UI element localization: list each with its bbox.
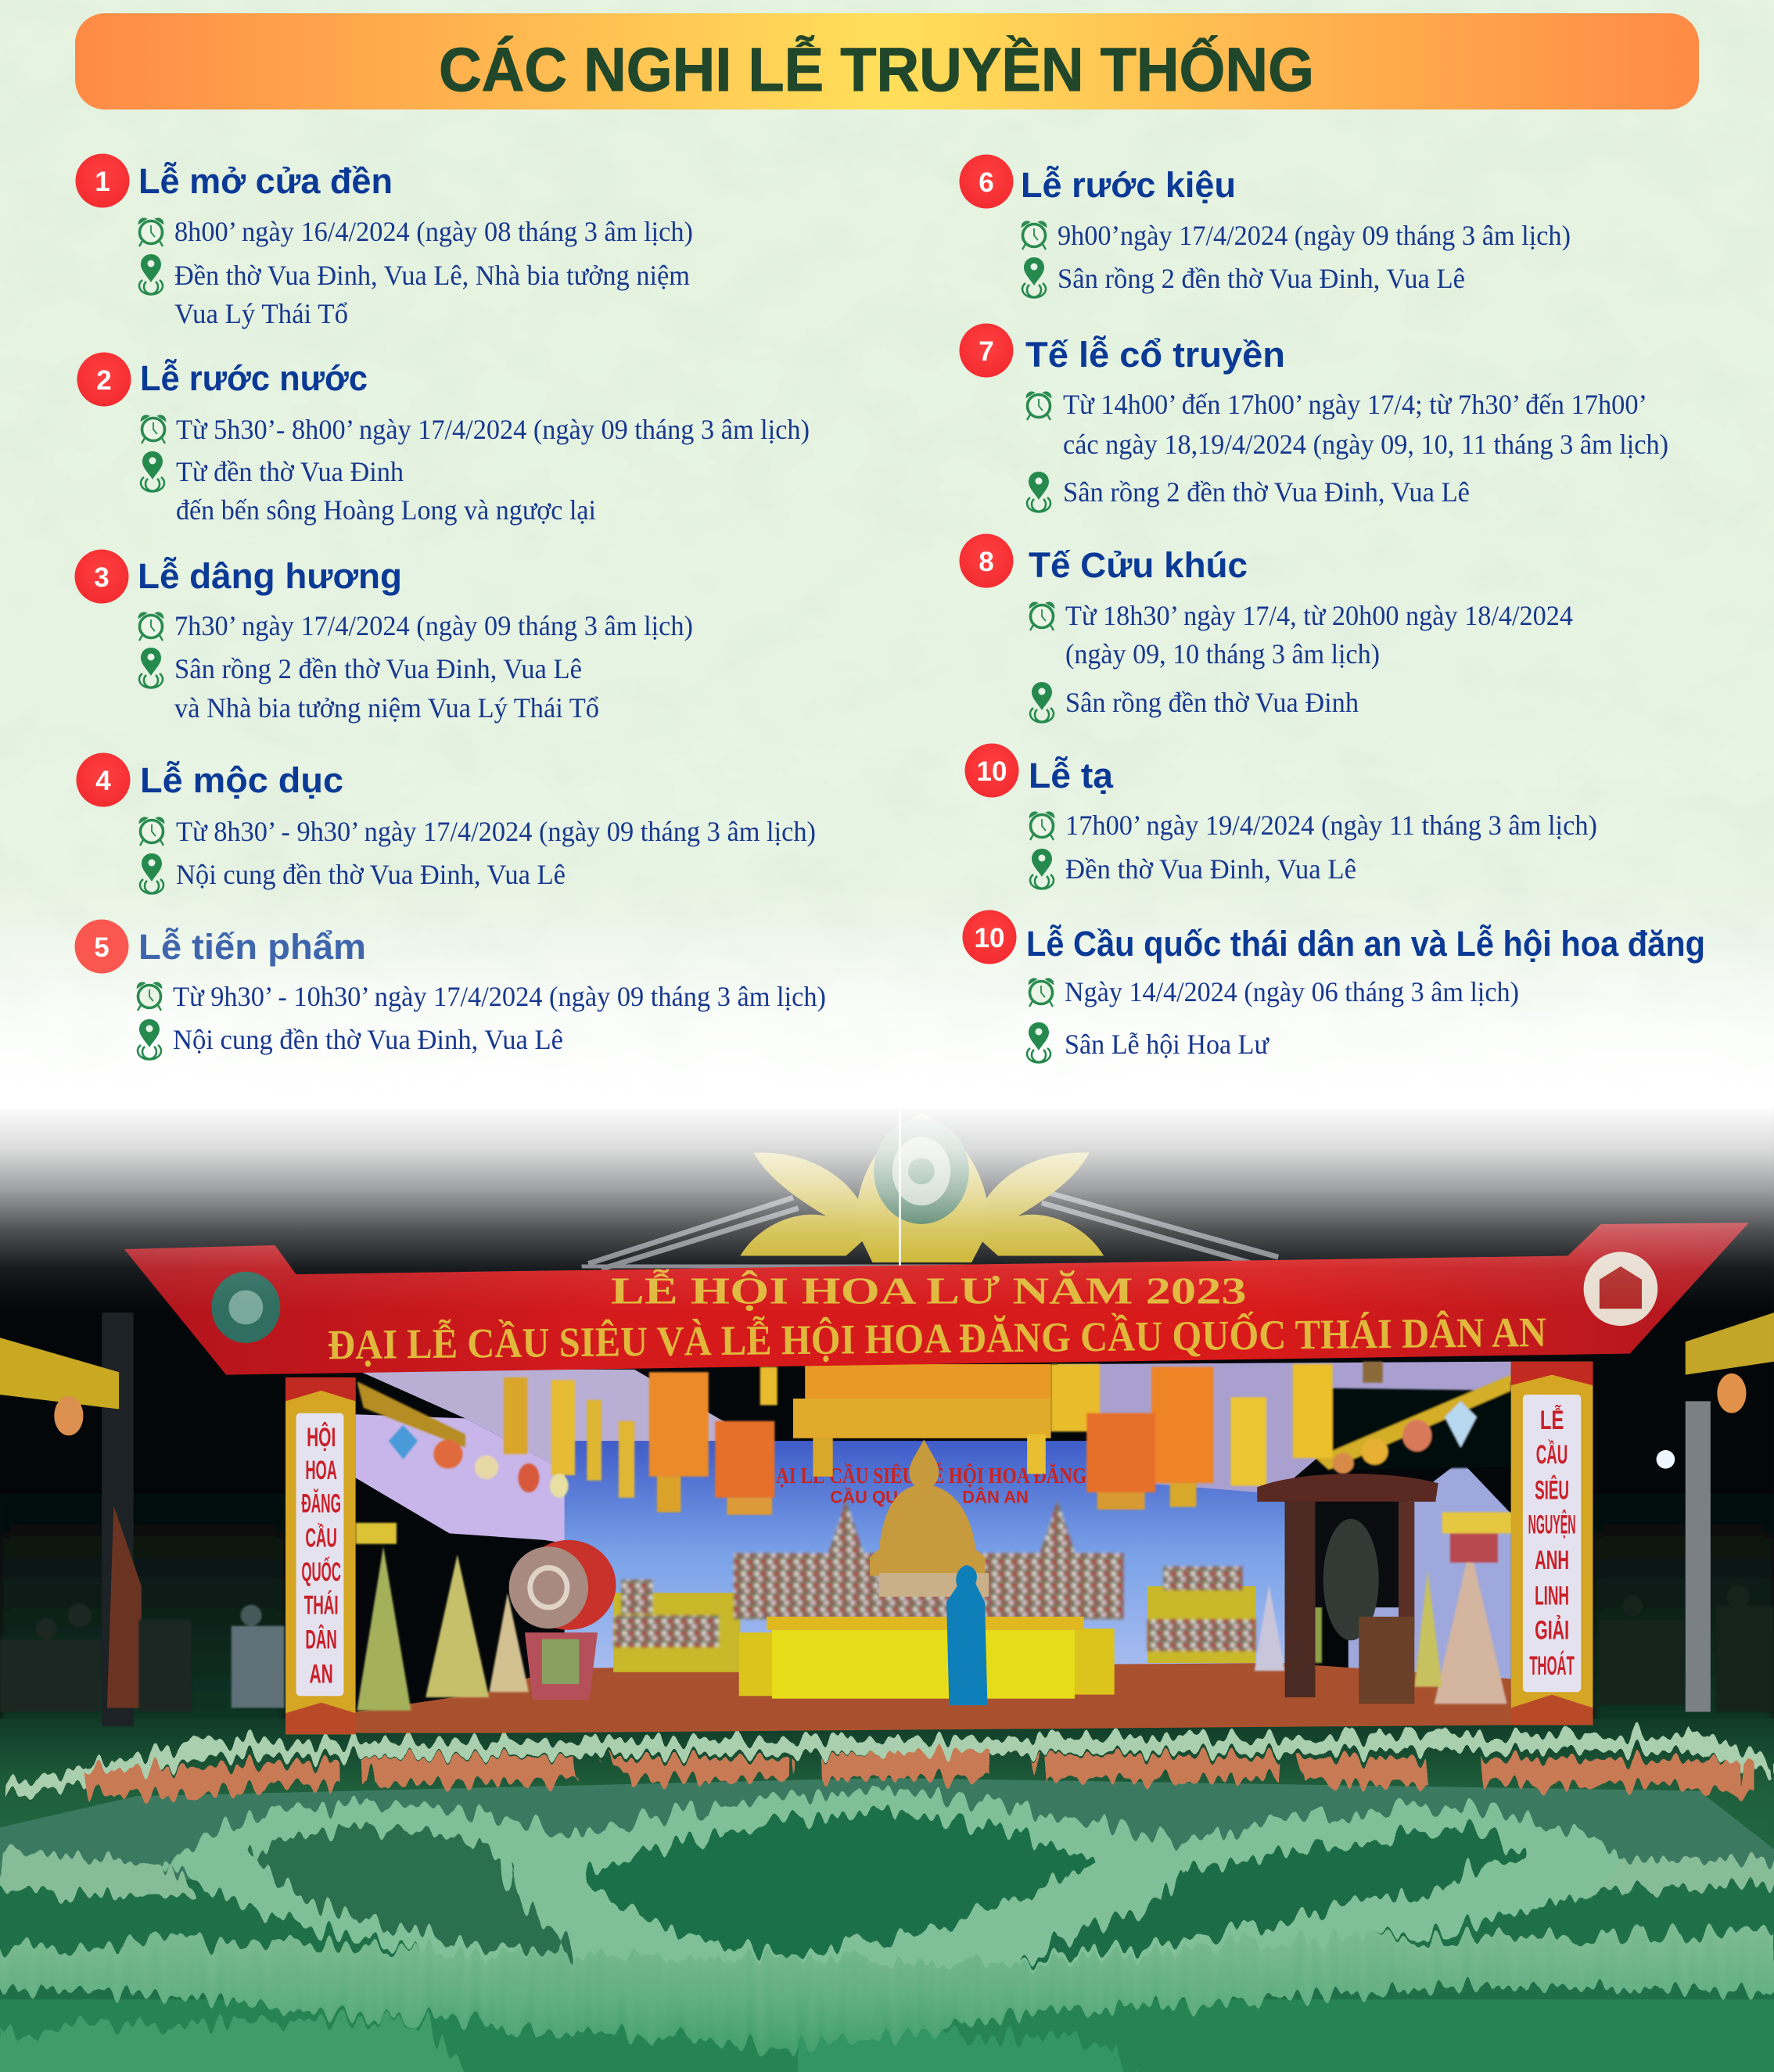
left pillar — [285, 1377, 356, 1734]
lotus front band — [0, 1932, 1774, 2057]
place: Nội cung đền thờ Vua Đinh, Vua Lê — [176, 859, 566, 890]
panel: ceremony 4 — [77, 752, 816, 893]
backdrop text: CẦU QU — [830, 1488, 898, 1507]
place: Sân rồng 2 đền thờ Vua Đinh, Vua Lê — [174, 653, 582, 684]
icon: pin — [1030, 682, 1054, 722]
tent at right — [1348, 1460, 1511, 1692]
lotus top row — [0, 1735, 1774, 1799]
dark surroundings left and right — [0, 1494, 1774, 1745]
time: 17h00’ ngày 19/4/2024 (ngày 11 tháng 3 âm lịch) — [1065, 810, 1597, 841]
pillar text — [301, 1422, 341, 1689]
top white fade — [0, 1105, 1774, 1310]
badge 10 — [962, 910, 1017, 964]
place: Từ đền thờ Vua Đinh — [176, 456, 404, 487]
white separator above photo — [0, 1091, 1774, 1108]
canopy left ceiling — [356, 1370, 764, 1494]
icon: pin — [1030, 849, 1054, 889]
time: (ngày 09, 10 tháng 3 âm lịch) — [1065, 638, 1380, 670]
time: Từ 18h30’ ngày 17/4, từ 20h00 ngày 18/4/2024 — [1065, 600, 1573, 631]
pillar text: HOA — [305, 1456, 337, 1485]
time: 8h00’ ngày 16/4/2024 (ngày 08 tháng 3 âm lịch) — [174, 216, 693, 247]
pillar text: CẦU — [305, 1523, 337, 1553]
left pillar: QUỐC — [301, 1557, 341, 1587]
heading 5: Lễ tiến phẩm — [138, 927, 366, 967]
lotus bottom centre band — [793, 2034, 1133, 2072]
badge 6: 6 — [979, 167, 994, 198]
time: Từ 5h30’- 8h00’ ngày 17/4/2024 (ngày 09 tháng 3 âm lịch) — [176, 414, 810, 445]
lotus bottom left band — [0, 2018, 476, 2072]
place: đến bến sông Hoàng Long và ngược lại — [176, 494, 596, 526]
panel: ceremony 3 — [75, 549, 693, 724]
badge 3 — [75, 549, 128, 604]
side trusses and awnings — [0, 1313, 1774, 1726]
place — [176, 456, 596, 526]
badge 10: 10 — [975, 923, 1004, 953]
lawn with lotus lantern field — [0, 1718, 1774, 2072]
pillar text: DÂN — [305, 1625, 337, 1654]
place: Vua Lý Thái Tổ — [174, 298, 348, 329]
icon: pin — [1027, 1022, 1050, 1062]
banner title line: LỄ HỘI HOA LƯ NĂM 2023 — [611, 1269, 1247, 1312]
crowd right — [1600, 1585, 1774, 1712]
yellow altar — [739, 1617, 1115, 1699]
main red banner — [124, 1223, 1749, 1375]
pillar text: LINH — [1535, 1582, 1569, 1611]
lotus loops shape — [170, 1788, 1620, 1968]
pillar text: ĐĂNG — [301, 1488, 341, 1518]
right pillar — [1511, 1362, 1593, 1725]
left emblem — [211, 1272, 280, 1343]
singer in blue ao dai — [946, 1565, 987, 1705]
loop opening centre — [589, 1809, 1097, 1958]
panel: ceremony 10 — [962, 910, 1705, 1062]
place: Sân rồng đền thờ Vua Đinh — [1065, 687, 1359, 718]
right emblem — [1584, 1251, 1657, 1326]
page background paper texture — [0, 0, 1774, 1111]
time — [1065, 600, 1573, 670]
panel: ceremony 8 — [959, 533, 1573, 722]
backdrop text: ẠI LỄ CẦU SIÊU LỄ HỘI HOA ĐĂNG — [776, 1462, 1086, 1488]
heading 10: Lễ Cầu quốc thái dân an và Lễ hội hoa đăng — [1026, 924, 1705, 964]
badge 8 — [959, 533, 1014, 588]
photo: festival stage at night — [0, 1097, 1774, 2072]
icon: pin — [140, 853, 163, 893]
icon: clock — [138, 983, 161, 1011]
title banner — [75, 13, 1699, 110]
roof truss — [582, 1192, 1282, 1269]
icon: clock — [1030, 813, 1054, 840]
icon: clock — [1027, 393, 1050, 420]
title: CÁC NGHI LỄ TRUYỀN THỐNG — [439, 34, 1314, 104]
place: Sân Lễ hội Hoa Lư — [1065, 1029, 1269, 1060]
golden buddha statue — [870, 1439, 989, 1597]
heading 4: Lễ mộc dục — [140, 760, 343, 800]
panel: ceremony 7 — [959, 324, 1668, 512]
backdrop text: DÂN AN — [962, 1488, 1029, 1507]
icon: pin — [139, 648, 163, 688]
pillar text: CẦU — [1536, 1440, 1568, 1470]
panel: ceremony 5 — [75, 920, 826, 1059]
pillar text: HỘI — [307, 1422, 336, 1453]
heading 3: Lễ dâng hương — [138, 556, 402, 596]
backdrop text — [776, 1462, 1086, 1507]
icon: pin — [138, 1019, 161, 1059]
place: Nội cung đền thờ Vua Đinh, Vua Lê — [173, 1024, 563, 1055]
lotus lanterns jagged shapes — [0, 1735, 1774, 2072]
flower arrangements — [613, 1500, 1256, 1651]
badge 4 — [77, 752, 130, 807]
white lotus side rows — [0, 1851, 192, 1903]
heading 8: Tế Cửu khúc — [1029, 545, 1248, 585]
pillar text: LỄ — [1540, 1406, 1564, 1435]
icon: clock — [139, 219, 163, 246]
badge 7: 7 — [979, 336, 994, 367]
lower lawn green — [0, 1885, 1774, 2072]
pillar text — [1528, 1406, 1575, 1681]
icon: pin — [139, 254, 163, 294]
canopy left wall — [356, 1414, 576, 1544]
badge 3: 3 — [94, 562, 110, 593]
badge 2: 2 — [96, 365, 112, 396]
stage floor — [356, 1663, 1511, 1733]
badge 6 — [959, 155, 1014, 208]
icon: clock — [139, 613, 163, 641]
time: 7h30’ ngày 17/4/2024 (ngày 09 tháng 3 âm lịch) — [174, 610, 693, 641]
icon: pin — [1027, 472, 1050, 512]
pillar text: THOÁT — [1529, 1651, 1575, 1681]
badge 5: 5 — [94, 932, 110, 963]
badge 4: 4 — [95, 766, 111, 796]
time: 9h00’ngày 17/4/2024 (ngày 09 tháng 3 âm lịch) — [1058, 220, 1571, 251]
time: Từ 8h30’ - 9h30’ ngày 17/4/2024 (ngày 09 tháng 3 âm lịch) — [176, 816, 816, 847]
badge 1: 1 — [95, 167, 110, 197]
heading le ta: Lễ tạ — [1029, 756, 1114, 795]
pillar text: ANH — [1535, 1546, 1569, 1575]
icon: clock — [142, 416, 165, 443]
badge 2 — [77, 352, 131, 407]
drum — [509, 1540, 616, 1700]
wooden bell frame — [1257, 1474, 1438, 1704]
heading 7: Tế lễ cổ truyền — [1025, 335, 1285, 375]
heading 2: Lễ rước nước — [140, 358, 368, 398]
time — [1063, 389, 1668, 460]
time: Từ 14h00’ đến 17h00’ ngày 17/4; từ 7h30’ đến 17h00’ — [1063, 389, 1647, 420]
loop opening left — [255, 1831, 569, 1960]
pillar text: AN — [309, 1659, 333, 1689]
panel: ceremony 1 — [75, 153, 693, 329]
badge 7 — [959, 324, 1014, 377]
backdrop — [565, 1441, 1285, 1672]
badge 10: 10 — [977, 756, 1007, 787]
heading 6: Lễ rước kiệu — [1021, 165, 1236, 205]
panel: ceremony 6 — [959, 155, 1571, 297]
pillar text: THÁI — [304, 1590, 339, 1620]
panel: ceremony 2 — [77, 352, 810, 526]
side altars — [613, 1586, 1256, 1672]
banner subtitle line: ĐẠI LỄ CẦU SIÊU VÀ LỄ HỘI HOA ĐĂNG CẦU QUỐC THÁI DÂN AN — [328, 1307, 1546, 1368]
hanging lanterns and banners — [357, 1362, 1511, 1515]
place — [174, 653, 599, 724]
badge 8: 8 — [979, 547, 994, 577]
place: Sân rồng 2 đền thờ Vua Đinh, Vua Lê — [1058, 263, 1465, 294]
right pillar: NGUYỆN — [1528, 1510, 1575, 1539]
gray green lawn centre — [0, 1778, 1774, 1880]
time: Ngày 14/4/2024 (ngày 06 tháng 3 âm lịch) — [1065, 976, 1519, 1007]
icon: clock — [1022, 222, 1046, 250]
panel: ceremony 9 — [965, 743, 1597, 889]
time: Từ 9h30’ - 10h30’ ngày 17/4/2024 (ngày 09 tháng 3 âm lịch) — [173, 981, 826, 1012]
icon: pin — [141, 451, 164, 491]
icon: clock — [1029, 979, 1053, 1007]
hanging central cloth — [793, 1364, 1051, 1477]
badge 1 — [75, 153, 130, 208]
canopy right ceiling — [1058, 1362, 1511, 1494]
place: Đền thờ Vua Đinh, Vua Lê, Nhà bia tưởng niệm — [174, 260, 690, 291]
time: các ngày 18,19/4/2024 (ngày 09, 10, 11 tháng 3 âm lịch) — [1063, 429, 1668, 460]
place — [174, 260, 690, 329]
crowd left — [0, 1603, 284, 1712]
loop opening right — [1019, 1827, 1519, 1963]
place: Đền thờ Vua Đinh, Vua Lê — [1065, 853, 1356, 885]
icon: clock — [1030, 603, 1054, 630]
place: và Nhà bia tưởng niệm Vua Lý Thái Tổ — [174, 692, 599, 724]
pillar text: SIÊU — [1535, 1475, 1569, 1505]
place: Sân rồng 2 đền thờ Vua Đinh, Vua Lê — [1063, 476, 1470, 508]
badge 10 — [965, 743, 1018, 798]
badge 5 — [75, 920, 128, 973]
roof ornament lotus and emblem — [740, 1108, 1104, 1266]
icon: pin — [1022, 257, 1046, 297]
icon: clock — [140, 818, 163, 846]
offering towers — [356, 1512, 1514, 1711]
pillar text: GIẢI — [1535, 1616, 1569, 1646]
orange lotus rows — [85, 1751, 1751, 1794]
heading 1: Lễ mở cửa đền — [138, 161, 393, 201]
